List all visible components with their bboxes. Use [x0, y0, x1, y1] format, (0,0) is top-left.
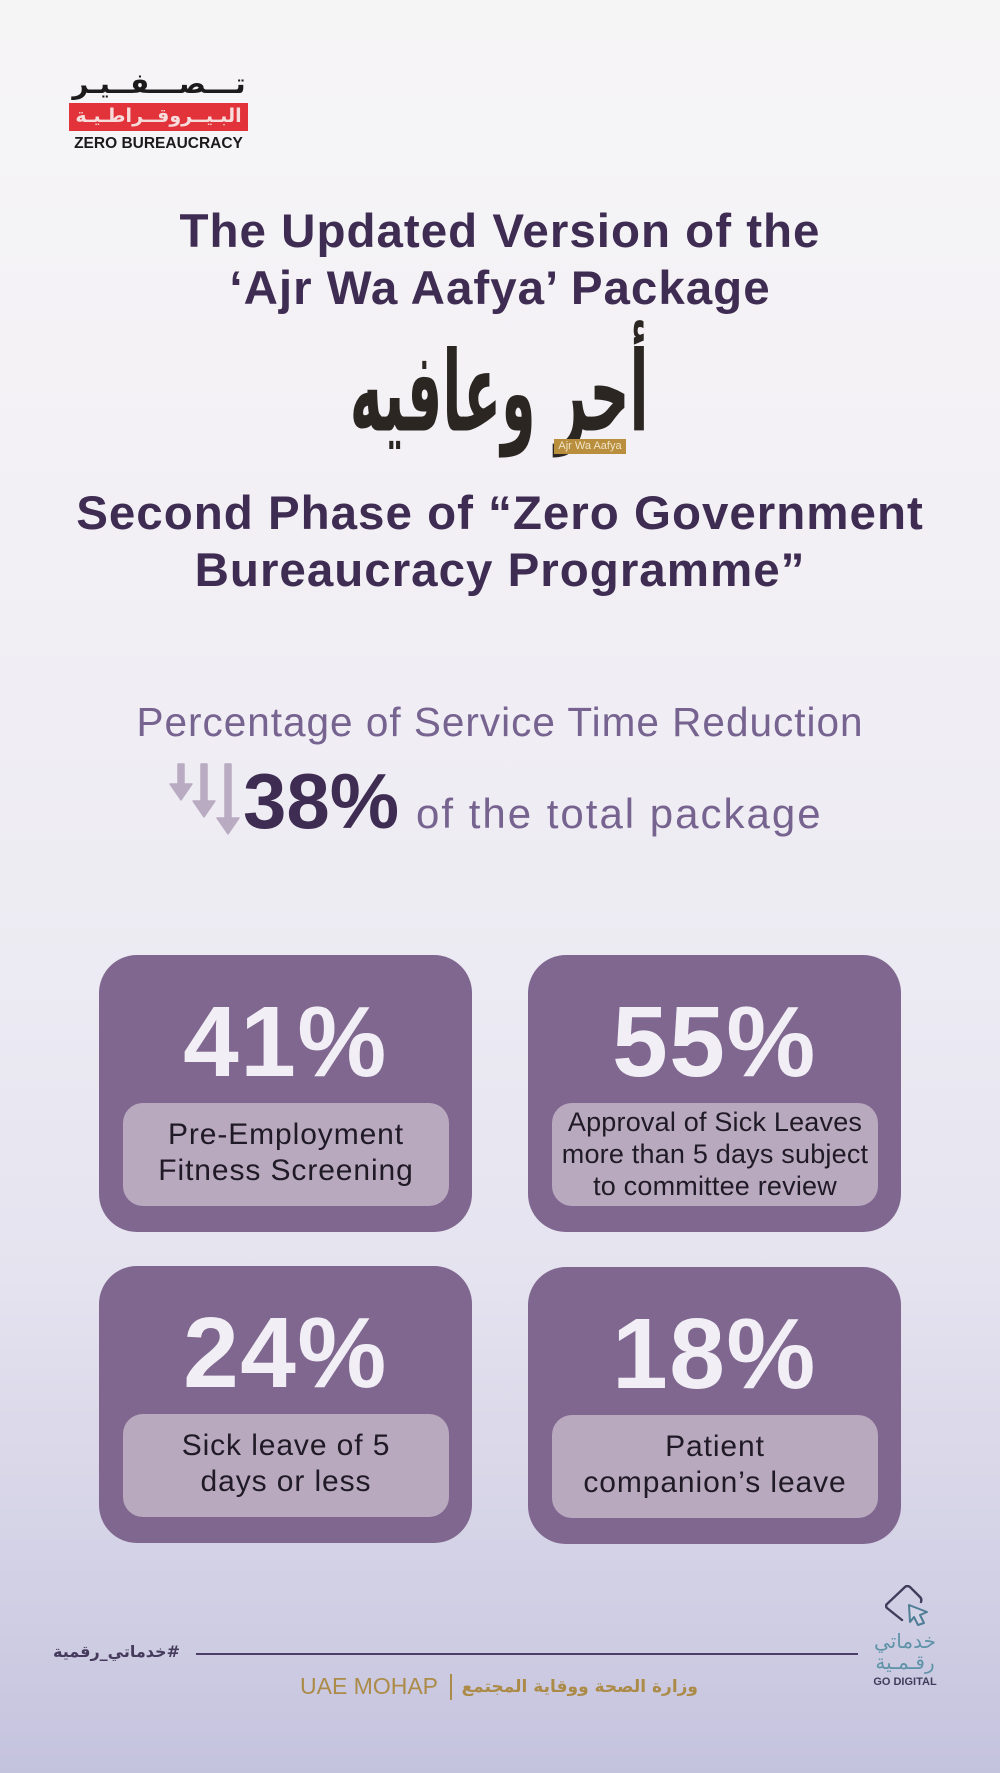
value: 18% [612, 1298, 817, 1410]
value: 41% [183, 986, 388, 1098]
label: days or less [201, 1464, 371, 1498]
label [552, 1103, 878, 1206]
card: 41 percent [99, 955, 472, 1232]
icon: three down arrows [169, 763, 240, 835]
card: 18 percent [528, 1267, 901, 1544]
subtitle: second phase [76, 487, 924, 597]
label: Patient [665, 1430, 765, 1462]
text: of the total package: of the total package [416, 790, 823, 837]
Arabic calligraphy: أجر وعافيه [350, 328, 648, 458]
label [123, 1103, 449, 1206]
label: companion’s leave [583, 1466, 847, 1498]
label: to committee review [593, 1170, 837, 1200]
Arabic ministry name: وزارة الصحة ووقاية المجتمع [462, 1677, 698, 1697]
card: 24 percent [99, 1266, 472, 1543]
logo: Zero Bureaucracy [69, 67, 248, 152]
logo Arabic word: تـــصـــفــيـر [72, 67, 246, 100]
value: 24% [183, 1297, 388, 1409]
separator [450, 1674, 452, 1700]
footer rule [196, 1653, 858, 1655]
Go Digital caption: GO DIGITAL [873, 1676, 937, 1688]
heading: service time reduction: Percentage of Service Time Reduction [136, 699, 864, 745]
card: 55 percent [528, 955, 901, 1232]
icon: cursor on rounded diamond [885, 1585, 928, 1626]
stat: 38 percent: 38% [243, 757, 399, 845]
title: updated version [180, 205, 820, 315]
gold tag: Ajr Wa Aafya [558, 440, 622, 452]
UAE MOHAP handle: UAE MOHAP [300, 1673, 438, 1699]
label: Fitness Screening [158, 1154, 414, 1186]
ministry line [300, 1673, 698, 1700]
logo: Go Digital [873, 1585, 937, 1688]
Ajr Wa Aafya calligraphic logo [350, 320, 648, 458]
label: more than 5 days subject [562, 1138, 868, 1168]
Arabic wordmark line two: رقـمـية [875, 1650, 935, 1674]
logo red banner: البـيــروقــراطـيـة [75, 105, 242, 127]
label: Pre-Employment [168, 1118, 404, 1150]
label [552, 1415, 878, 1518]
hashtag: #خدماتي_رقمية [53, 1642, 180, 1661]
title: updated version: The Updated Version of the [180, 205, 820, 258]
label: Sick leave of 5 [182, 1428, 390, 1462]
label [123, 1414, 449, 1517]
subtitle: second phase: Second Phase of “Zero Government [76, 487, 924, 540]
value: 55% [612, 986, 817, 1098]
title: updated version: ‘Ajr Wa Aafya’ Package [229, 262, 771, 315]
label: Approval of Sick Leaves [568, 1106, 862, 1136]
subtitle: second phase: Bureaucracy Programme” [195, 544, 805, 597]
logo English caption: ZERO BUREAUCRACY [74, 135, 243, 152]
Arabic wordmark line one: خدماتي [874, 1629, 936, 1653]
